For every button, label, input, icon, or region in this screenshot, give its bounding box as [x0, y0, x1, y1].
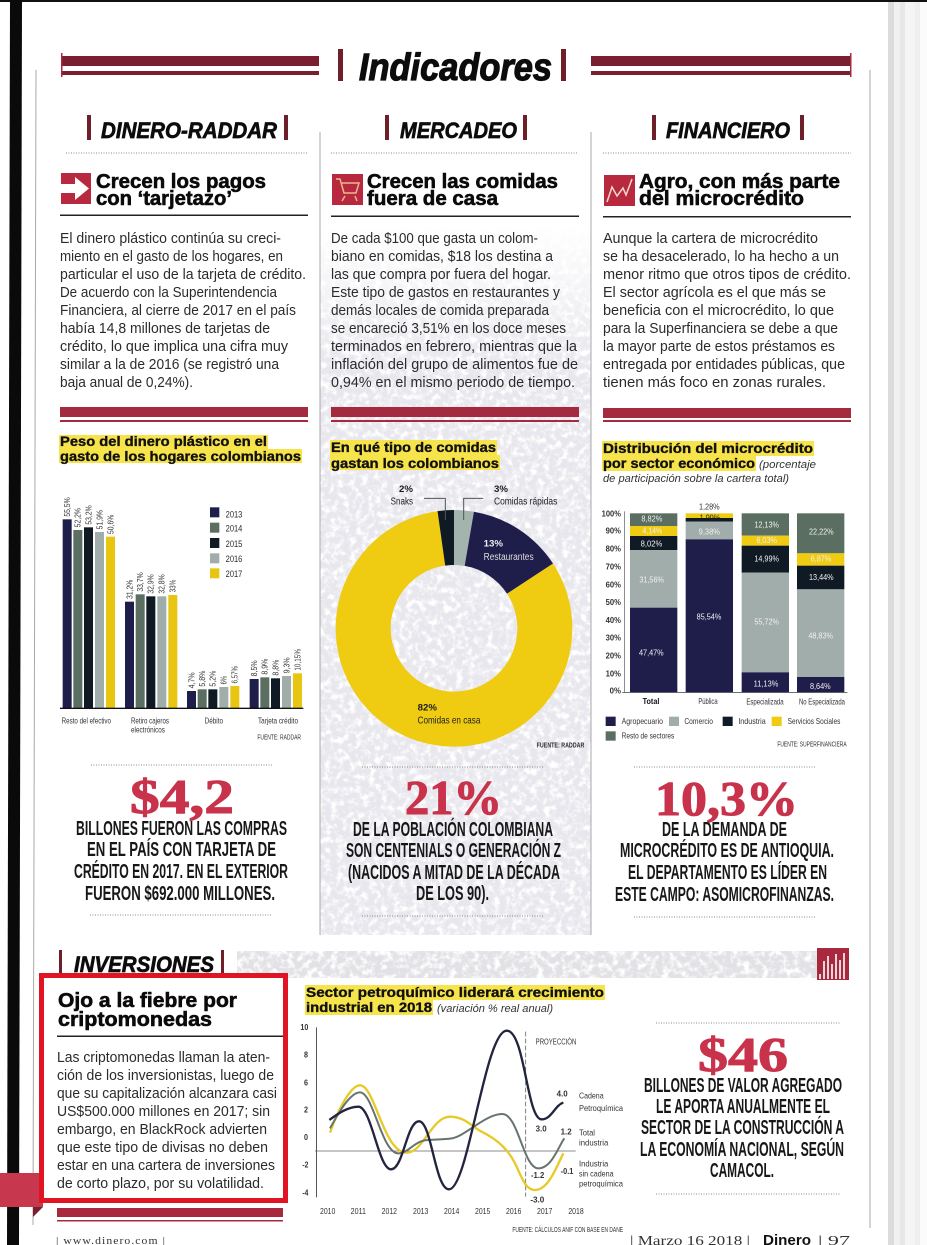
- y labels: 0: [304, 1132, 308, 1142]
- legend: 2013: [226, 509, 242, 519]
- stat: $4,2: EN EL PAÍS CON TARJETA DE: [87, 838, 276, 861]
- stat: 21%: DE LOS 90).: [416, 883, 489, 905]
- x labels: [320, 1206, 584, 1216]
- x labels: 2012: [382, 1206, 397, 1216]
- stat: $4,2: $4,2: [130, 769, 234, 824]
- chart title: Distribución del microcrédito: por sector económico: [603, 456, 755, 471]
- body text: de corto plazo, por su volatilidad.: [57, 1176, 264, 1192]
- category labels: Resto del efectivo: [62, 716, 111, 726]
- chart title: Distribución del microcrédito: de participación sobre la cartera total): [603, 473, 789, 485]
- x labels: 2010: [320, 1206, 336, 1216]
- label: comidas en casa: Comidas en casa: [418, 715, 481, 726]
- annotations: -0.1: [561, 1166, 574, 1176]
- panel: Dinero-Raddar: [60, 170, 308, 391]
- y axis: 20%: [606, 651, 622, 661]
- stat: 10,3%: DE LA DEMANDA DE: [662, 819, 787, 841]
- bar: Total: [630, 513, 677, 706]
- bars: Débito: [187, 686, 239, 708]
- value labels: 51,9%: [94, 510, 104, 529]
- label: comidas en casa: [418, 703, 481, 726]
- value labels: 8,8%: [270, 659, 280, 676]
- red tab: [0, 1173, 43, 1217]
- label: snaks: [391, 484, 414, 508]
- y axis: 40%: [606, 615, 622, 625]
- body text: embargo, en BlackRock advierten: [57, 1122, 267, 1138]
- body text: las que compra por fuera del hogar.: [331, 267, 551, 283]
- icon: bars: [817, 948, 849, 980]
- body text: ción de los inversionistas, luego de: [57, 1068, 274, 1084]
- panel: Financiero: [603, 170, 851, 391]
- stat: 21%: DE LA POBLACIÓN COLOMBIANA: [353, 817, 553, 841]
- icon: shopping cart: [332, 174, 363, 205]
- bar: Especializada: 12,13%: [754, 519, 780, 529]
- body text: biano en comidas, $18 los destina a: [331, 249, 553, 265]
- label: comidas rápidas: [494, 484, 557, 508]
- annotations: -3.0: [530, 1194, 545, 1204]
- value labels: 5,8%: [197, 670, 207, 687]
- label: comidas rápidas: 3%: [494, 484, 509, 494]
- stacked bar chart: microcrédito por sector: [602, 501, 847, 749]
- bar: No Especializada: 6,87%: [811, 554, 832, 564]
- annotations: PROYECCIÓN: [536, 1037, 576, 1047]
- y axis: 0%: [610, 686, 622, 696]
- y axis: 50%: [606, 597, 622, 607]
- chart title: En qué tipo de comidas: gastan los colombianos: [331, 456, 499, 471]
- body text: que su capitalización alcanzara casi: [57, 1086, 277, 1102]
- y labels: 8: [304, 1050, 308, 1060]
- chart title: Sector petroquímico: industrial en 2018: [306, 1000, 432, 1015]
- value labels: 32,9%: [146, 574, 156, 594]
- body text: El sector agrícola es el que más se: [603, 285, 826, 301]
- bar: Total: 31,56%: [639, 575, 665, 585]
- source: FUENTE: SUPERFINANCIERA: [777, 740, 847, 749]
- annotations: 4.0: [557, 1088, 568, 1098]
- stat: $46: [640, 1027, 844, 1182]
- annotations: [530, 1037, 623, 1204]
- stat: $4,2: FUERON $692.000 MILLONES.: [85, 883, 275, 905]
- body text: demás locales de comida preparada: [331, 303, 549, 319]
- value labels: 32,8%: [157, 574, 167, 594]
- section heading: Inversiones: INVERSIONES: [74, 952, 214, 977]
- legend: [606, 716, 840, 741]
- y axis: 70%: [606, 561, 622, 571]
- bar: Total: Total: [643, 696, 659, 706]
- annotations: Total: [579, 1127, 595, 1137]
- donut chart: tipo de comidas: [336, 484, 585, 749]
- heading: Agro, con más parte: [639, 170, 840, 193]
- category labels: [62, 716, 301, 741]
- body text: [603, 231, 851, 391]
- label: snaks: Snaks: [391, 497, 413, 508]
- body text: [60, 231, 306, 391]
- body text: se ha desacelerado, lo ha hecho a un: [603, 249, 839, 265]
- body text: Las criptomonedas llaman la aten-: [57, 1050, 270, 1066]
- x labels: 2013: [413, 1206, 429, 1216]
- section heading: Dinero-Raddar: DINERO-RADDAR: [101, 118, 277, 143]
- stat: $46: CAMACOL.: [710, 1160, 774, 1182]
- dotted rules: [66, 153, 851, 1194]
- panel: Mercadeo: [331, 170, 579, 391]
- x labels: 2011: [351, 1206, 366, 1216]
- line: cadena petroquímica: [329, 1031, 563, 1189]
- body text: US$500.000 millones en 2017; sin: [57, 1104, 270, 1120]
- legend: 2014: [226, 524, 242, 534]
- axes: [315, 1027, 576, 1197]
- bar: Total: 8,02%: [641, 538, 663, 548]
- bar: No Especializada: [797, 513, 845, 706]
- body text: 0,94% en el mismo periodo de tiempo.: [331, 375, 575, 391]
- annotations: sin cadena: [579, 1169, 614, 1179]
- value labels: 9,3%: [281, 657, 291, 673]
- stat: $4,2: [74, 769, 288, 905]
- heading: [331, 170, 579, 217]
- line chart: crecimiento industrial: [300, 1022, 623, 1234]
- bars: Retiro cajeros: [125, 594, 177, 708]
- bar: Pública: 1,28%: [699, 501, 720, 511]
- y labels: 6: [304, 1077, 308, 1087]
- annotations: Industria: [579, 1159, 609, 1169]
- heading: [603, 170, 851, 218]
- body text: Aunque la cartera de microcrédito: [603, 231, 818, 247]
- legend: Resto de sectores: [622, 730, 674, 740]
- y labels: [300, 1022, 309, 1197]
- body text: [331, 231, 578, 391]
- speckled middle column background: [320, 225, 591, 935]
- label: restaurantes: 13%: [484, 539, 504, 549]
- source: FUENTE: CÁLCULOS ANIF CON BASE EN DANE: [512, 1225, 623, 1234]
- body text: El dinero plástico continúa su creci-: [60, 231, 281, 247]
- value labels: 33%: [168, 579, 178, 592]
- body text: miento en el gasto de los hogares, en: [60, 249, 283, 265]
- body text: Este tipo de gastos en restaurantes y: [331, 285, 561, 301]
- icon: arrow: [61, 173, 91, 204]
- chart title: En qué tipo de comidas: En qué tipo de comidas: [331, 440, 496, 455]
- annotations: Petroquímica: [579, 1103, 623, 1113]
- bar: Pública: 9,38%: [699, 527, 721, 537]
- y labels: 10: [300, 1022, 309, 1032]
- value labels: 6%: [219, 676, 229, 684]
- chart title: Distribución del microcrédito: (porcentaje: [759, 459, 816, 471]
- annotations: petroquímica: [579, 1179, 623, 1189]
- y labels: 2: [304, 1105, 308, 1115]
- category labels: electrónicos: [131, 724, 165, 734]
- stat: 21%: SON CENTENIALS O GENERACIÓN Z: [346, 838, 561, 862]
- heading: Crecen las comidas: [367, 170, 558, 193]
- x labels: 2016: [506, 1206, 522, 1216]
- bar: Total: 8,82%: [641, 514, 663, 524]
- bar chart: peso del dinero plástico: [60, 497, 303, 741]
- legend: Agropecuario: [622, 716, 663, 726]
- heading: fuera de casa: [367, 187, 499, 210]
- category labels: Tarjeta crédito: [258, 716, 298, 726]
- legend: Comercio: [684, 716, 713, 726]
- stat: 21%: [346, 770, 561, 905]
- panel: Ojo a la fiebre por criptomonedas: [42, 976, 286, 1200]
- y axis: 80%: [606, 544, 622, 554]
- annotations: Cadena: [579, 1091, 604, 1101]
- maroon dividers: [60, 407, 851, 422]
- y axis: 60%: [606, 579, 622, 589]
- header: Indicadores: [61, 47, 852, 89]
- bar: Pública: 85,54%: [697, 612, 722, 622]
- body text: De acuerdo con la Superintendencia: [60, 285, 277, 301]
- annotations: -1.2: [531, 1170, 545, 1180]
- bar: No Especializada: No Especializada: [799, 696, 845, 706]
- heading: [57, 989, 283, 1037]
- category labels: Débito: [205, 716, 223, 726]
- legend: Industria: [738, 716, 766, 726]
- bar: Total: 47,47%: [639, 647, 664, 657]
- bar: Especializada: 55,72%: [754, 617, 780, 627]
- body text: crédito, lo que implica una cifra muy: [60, 339, 289, 355]
- body text: tienen más foco en zonas rurales.: [603, 375, 826, 391]
- value labels: 50,6%: [105, 514, 115, 534]
- bar: Especializada: 14,99%: [754, 553, 780, 563]
- body text: para la Superfinanciera se debe a que: [603, 321, 838, 337]
- bar: No Especializada: 22,22%: [809, 527, 834, 537]
- body text: terminados en febrero, mientras que la: [331, 339, 577, 355]
- stat: 21%: (NACIDOS A MITAD DE LA DÉCADA: [348, 861, 560, 884]
- heading: Ojo a la fiebre por: [58, 989, 237, 1012]
- maroon divider: [57, 1208, 283, 1222]
- body text: menor ritmo que otros tipos de crédito.: [603, 267, 851, 283]
- y labels: -2: [302, 1160, 309, 1170]
- bar: Pública: Pública: [698, 696, 718, 706]
- chart title: En qué tipo de comidas: [330, 440, 500, 471]
- label: comidas rápidas: Comidas rápidas: [494, 497, 557, 508]
- legend: Servicios Sociales: [788, 716, 840, 726]
- black binding bar: [7, 0, 22, 1245]
- value labels: 31,2%: [124, 579, 134, 599]
- value labels: 4,7%: [186, 672, 196, 688]
- bars: Tarjeta crédito: [250, 673, 302, 708]
- value labels: 55,5%: [62, 497, 72, 517]
- stat: $4,2: BILLONES FUERON LAS COMPRAS: [76, 818, 287, 840]
- body text: similar a la de 2016 (se registró una: [60, 357, 279, 373]
- y axis: 100%: [602, 508, 622, 518]
- value labels: 33,7%: [135, 572, 145, 592]
- body text: la mayor parte de estos préstamos es: [603, 339, 835, 355]
- body text: De cada $100 que gasta un colom-: [331, 231, 538, 247]
- body text: había 14,8 millones de tarjetas de: [60, 321, 270, 337]
- label: restaurantes: [484, 539, 534, 563]
- bar: Pública: 1,99%: [700, 513, 721, 523]
- chart title: Distribución del microcrédito: Distribución del microcrédito: [603, 441, 813, 456]
- value labels: 8,5%: [249, 660, 259, 676]
- value labels: 52,2%: [73, 508, 83, 527]
- heading: criptomonedas: [58, 1008, 212, 1031]
- heading: del microcrédito: [639, 187, 804, 210]
- y axis: [602, 508, 847, 696]
- y labels: -4: [302, 1187, 309, 1197]
- y axis: 90%: [606, 526, 622, 536]
- chart title: Distribución del microcrédito: [602, 441, 816, 485]
- annotations: industria: [579, 1137, 609, 1147]
- body text: estar en una cartera de inversiones: [57, 1158, 275, 1174]
- legend: 2015: [226, 539, 242, 549]
- body text: particular el uso de la tarjeta de crédito.: [60, 267, 306, 283]
- chart title: Peso del dinero plástico: Peso del dinero plástico en el: [60, 434, 267, 449]
- value labels: 6,57%: [230, 666, 240, 683]
- section heading: Financiero: FINANCIERO: [666, 118, 790, 143]
- bar: Especializada: 11,13%: [754, 678, 779, 688]
- body text: beneficia con el microcrédito, lo que: [603, 303, 834, 319]
- chart title: Sector petroquímico: [305, 985, 605, 1015]
- bar: Especializada: Especializada: [746, 696, 784, 706]
- footer: folio: [630, 1232, 850, 1245]
- icon: line chart: [604, 175, 635, 206]
- chart title: Sector petroquímico: (variación % real anual): [437, 1003, 553, 1015]
- bar: Especializada: [742, 513, 789, 706]
- bar: No Especializada: 13,44%: [809, 572, 834, 582]
- stat: 21%: 21%: [405, 770, 502, 825]
- bars: Resto del efectivo: [63, 519, 115, 708]
- y axis: 30%: [606, 633, 622, 643]
- stat: $4,2: CRÉDITO EN 2017. EN EL EXTERIOR: [74, 860, 288, 883]
- chart title: Sector petroquímico: Sector petroquímico liderará crecimiento: [306, 985, 604, 1000]
- annotations: 3.0: [536, 1124, 547, 1134]
- chart title: Peso del dinero plástico: gasto de los hogares colombianos: [60, 449, 301, 464]
- label: restaurantes: Restaurantes: [484, 552, 534, 563]
- stat: $46: $46: [698, 1027, 788, 1082]
- body text: Financiera, al cierre de 2017 en el país: [60, 303, 296, 319]
- stat: 10,3%: 10,3%: [655, 771, 798, 826]
- x labels: 2014: [444, 1206, 460, 1216]
- x labels: 2015: [475, 1206, 491, 1216]
- bar: No Especializada: 8,64%: [810, 681, 831, 691]
- chart title: Peso del dinero plástico: [59, 434, 302, 464]
- body text: inflación del grupo de alimentos fue de: [331, 357, 578, 373]
- stat: 10,3%: [615, 771, 834, 906]
- heading: con ‘tarjetazo’: [96, 187, 232, 210]
- value labels: 8,9%: [260, 658, 270, 675]
- line: industria sin cadena petroquímica: [330, 1085, 563, 1190]
- legend: 2017: [226, 569, 242, 579]
- section heading: Mercadeo: MERCADEO: [400, 118, 517, 143]
- body text: baja anual de 0,24%).: [60, 375, 193, 391]
- legend: 2016: [226, 554, 242, 564]
- label: comidas en casa: 82%: [418, 703, 438, 713]
- heading: Crecen los pagos: [96, 170, 266, 193]
- x labels: 2018: [568, 1206, 584, 1216]
- body text: se encareció 3,51% en los doce meses: [331, 321, 566, 337]
- body text: que este tipo de divisas no deben: [57, 1140, 268, 1156]
- bar: Total: 4,14%: [642, 525, 663, 535]
- heading: [60, 170, 308, 216]
- value labels: 10,15%: [292, 649, 302, 671]
- value labels: 53,2%: [83, 505, 93, 525]
- bar: Especializada: 6,03%: [756, 535, 778, 545]
- annotations: 1.2: [561, 1127, 572, 1137]
- body text: entregada por entidades públicas, que: [603, 357, 845, 373]
- bar: No Especializada: 48,83%: [808, 631, 834, 641]
- value labels: [62, 497, 302, 688]
- x labels: 2017: [537, 1206, 553, 1216]
- legend: [210, 507, 242, 579]
- header: Indicadores: Indicadores: [359, 47, 552, 89]
- value labels: 5,2%: [208, 670, 218, 687]
- bar: Pública: [686, 501, 733, 706]
- label: snaks: 2%: [399, 484, 414, 494]
- speckled band: Inversiones: [237, 951, 817, 978]
- line: total industria: [330, 1092, 564, 1168]
- category labels: FUENTE: RADDAR: [257, 732, 301, 741]
- category labels: Retiro cajeros: [131, 716, 169, 726]
- y axis: 10%: [606, 668, 622, 678]
- source: FUENTE: RADDAR: [537, 740, 585, 749]
- body text: [57, 1050, 277, 1192]
